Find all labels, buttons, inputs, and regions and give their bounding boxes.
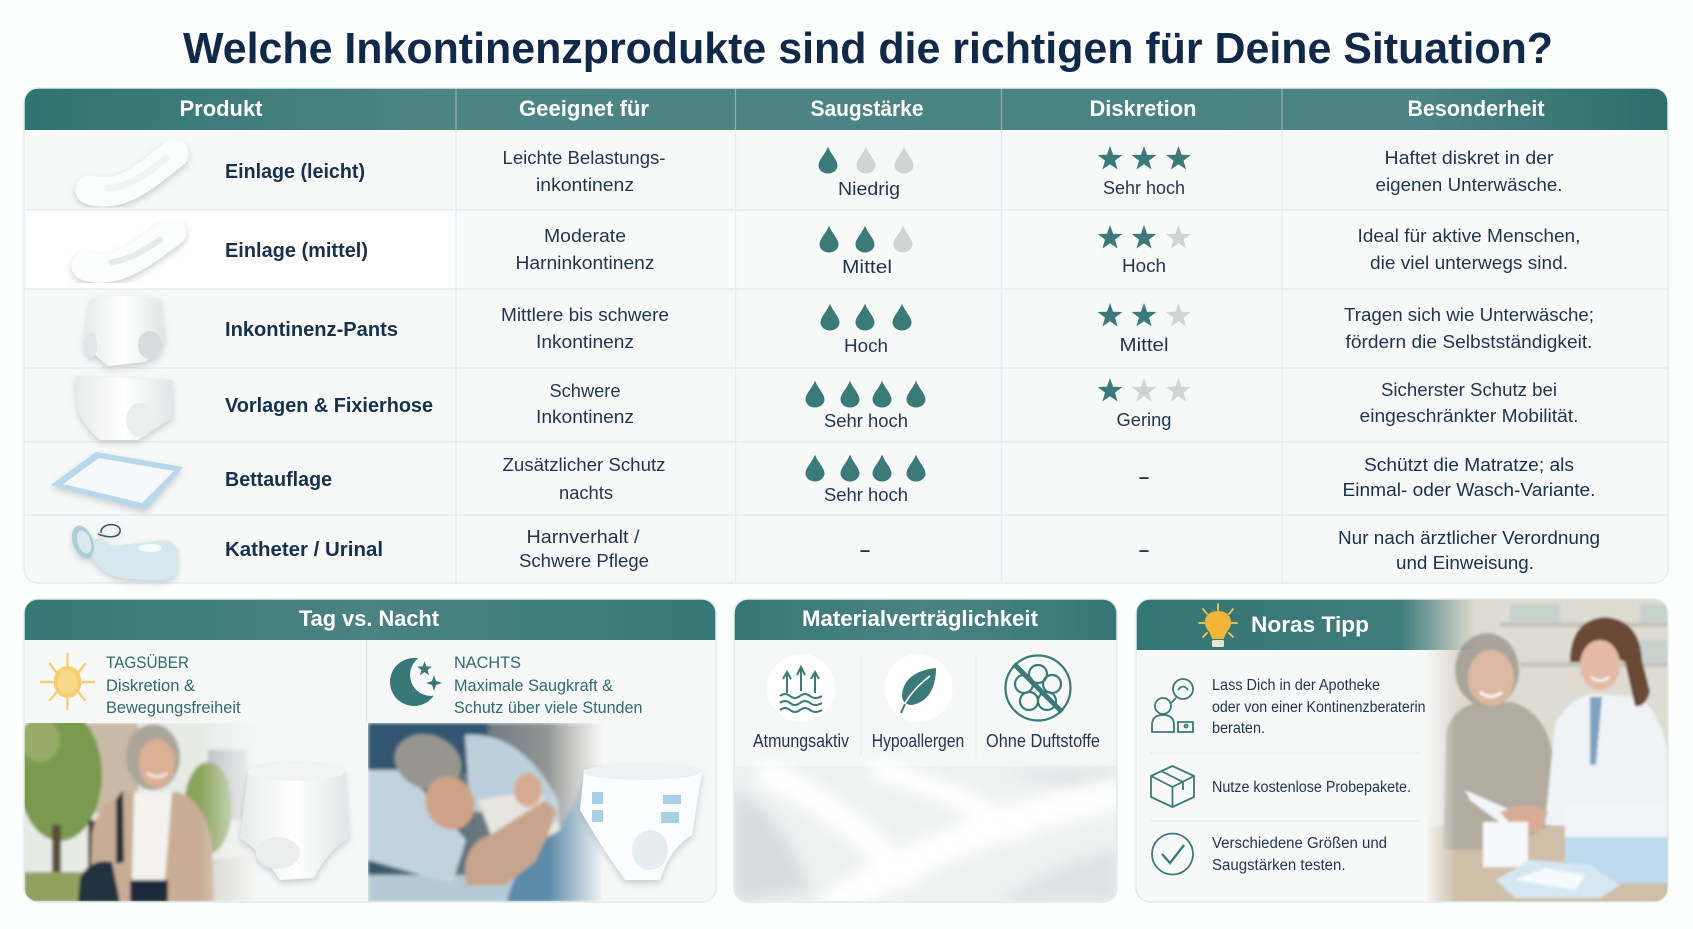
- rating: discretion sehr hoch: [1098, 146, 1191, 198]
- cell: suitable for, row 3: Mittlere bis schwere: [501, 304, 669, 325]
- photo: white pants product: [240, 763, 349, 880]
- cell: suitable for, row 4: [536, 380, 634, 427]
- table header row: [180, 96, 1545, 121]
- rating: absorbency none: –: [860, 539, 870, 560]
- text: nachts: [454, 654, 642, 717]
- cell: suitable for, row 6: [519, 526, 649, 571]
- table header row: Produkt: [180, 96, 263, 121]
- note, row 6: und Einweisung.: [1396, 552, 1534, 573]
- rating: absorbency niedrig: [818, 146, 914, 199]
- note, row 1: Haftet diskret in der: [1384, 147, 1554, 168]
- rating: absorbency sehr hoch: [806, 380, 926, 431]
- note, row 2: Ideal für aktive Menschen,: [1358, 225, 1580, 246]
- panel: Tag vs. Nacht: [18, 599, 716, 902]
- rating: absorbency niedrig: Niedrig: [838, 178, 900, 199]
- label: Bettauflage: Bettauflage: [225, 469, 332, 491]
- label: Vorlagen & Fixierhose: Vorlagen & Fixierhose: [225, 395, 433, 417]
- cell: suitable for, row 1: inkontinenz: [536, 174, 634, 195]
- text: tip sizes: [1212, 835, 1387, 874]
- cell: suitable for, row 1: [502, 147, 666, 195]
- cell: suitable for, row 6: Harnverhalt /: [526, 526, 640, 547]
- photo: woman sleeping in bed: [368, 723, 601, 902]
- cell: suitable for, row 3: Inkontinenz: [536, 331, 634, 352]
- icon: check mark: [1152, 834, 1193, 874]
- note, row 4: Sicherster Schutz bei: [1381, 379, 1557, 400]
- label: Einlage (mittel): Einlage (mittel): [225, 240, 368, 262]
- text: tip samples: Nutze kostenlose Probepakete.: [1212, 779, 1411, 796]
- icon: sun: [41, 654, 94, 709]
- rating: absorbency sehr hoch: Sehr hoch: [824, 410, 908, 431]
- heading: Materialverträglichkeit: Materialverträglichkeit: [802, 606, 1039, 631]
- cell: suitable for, row 5: [502, 454, 666, 503]
- note, row 3: Tragen sich wie Unterwäsche;: [1344, 304, 1594, 325]
- rating: absorbency sehr hoch, bed pad: [806, 454, 926, 505]
- cell: suitable for, row 2: [516, 225, 654, 273]
- rating: discretion none: –: [1139, 466, 1149, 487]
- icon: no fragrance: [1006, 656, 1070, 720]
- label: Atmungsaktiv: Atmungsaktiv: [753, 730, 850, 751]
- text: nachts: NACHTS: [454, 654, 521, 672]
- note, row 1: eigenen Unterwäsche.: [1376, 174, 1562, 195]
- text: tagsüber: TAGSÜBER: [106, 654, 189, 672]
- rating: absorbency hoch: Hoch: [844, 335, 888, 356]
- text: tip pharmacy: Lass Dich in der Apotheke: [1212, 677, 1380, 694]
- icon: bed pad: [51, 452, 183, 510]
- heading: Tag vs. Nacht: Tag vs. Nacht: [299, 606, 440, 631]
- text: tip pharmacy: [1212, 677, 1426, 737]
- photo: night diaper product: [580, 764, 702, 880]
- text: tagsüber: [106, 654, 241, 717]
- text: tip pharmacy: oder von einer Kontinenzberaterin: [1212, 699, 1426, 716]
- text: nachts: Schutz über viele Stunden: [454, 699, 642, 717]
- text: tagsüber: Diskretion &: [106, 677, 195, 695]
- note, row 5: Einmal- oder Wasch-Variante.: [1342, 479, 1596, 500]
- icon: moon and stars: [390, 654, 452, 706]
- rating: discretion hoch: [1098, 225, 1191, 276]
- cell: suitable for, row 1: Leichte Belastungs-: [502, 147, 666, 168]
- cell: suitable for, row 5: Zusätzlicher Schutz: [502, 454, 666, 475]
- rating: absorbency mittel: Mittel: [842, 256, 892, 277]
- text: tip pharmacy: beraten.: [1212, 720, 1265, 737]
- panel: product comparison table: [24, 88, 1668, 583]
- icon: package: [1151, 766, 1194, 807]
- rating: discretion mittel: [1098, 303, 1191, 355]
- rating: discretion sehr hoch: Sehr hoch: [1103, 177, 1185, 198]
- note, row 3: fördern die Selbstständigkeit.: [1346, 331, 1592, 352]
- title: Welche Inkontinenzprodukte sind die richtigen für Deine Situation?: [183, 24, 1553, 73]
- icon: pad with fixation pants: [75, 376, 173, 440]
- rating: absorbency mittel: [820, 226, 912, 277]
- rating: discretion none, urinal: –: [1139, 539, 1149, 560]
- cell: suitable for, row 5: nachts: [559, 482, 613, 503]
- note, row 3: [1344, 304, 1594, 352]
- rating: absorbency sehr hoch, bed pad: Sehr hoch: [824, 484, 908, 505]
- heading: Noras Tipp: Noras Tipp: [1251, 612, 1369, 637]
- photo: pharmacist advising an older woman: [1416, 600, 1668, 902]
- note, row 4: eingeschränkter Mobilität.: [1360, 405, 1578, 426]
- cell: suitable for, row 4: Inkontinenz: [536, 406, 634, 427]
- cell: suitable for, row 4: Schwere: [550, 380, 620, 401]
- label: Hypoallergen: Hypoallergen: [872, 730, 964, 751]
- text: tagsüber: Bewegungsfreiheit: [106, 699, 241, 717]
- panel: Materialverträglichkeit: [734, 599, 1117, 905]
- table header row: Saugstärke: [810, 96, 924, 121]
- rating: discretion gering: [1098, 378, 1191, 430]
- rating: discretion gering: Gering: [1116, 409, 1172, 430]
- panel: Noras Tipp: [1136, 590, 1680, 910]
- note, row 6: [1338, 527, 1600, 573]
- icon: light pad: [90, 154, 174, 192]
- cell: suitable for, row 6: Schwere Pflege: [519, 550, 649, 571]
- table header row: Geeignet für: [519, 96, 649, 121]
- cell: suitable for, row 3: [501, 304, 669, 352]
- label: Katheter / Urinal: Katheter / Urinal: [225, 539, 383, 561]
- note, row 5: Schützt die Matratze; als: [1364, 454, 1574, 475]
- note, row 2: die viel unterwegs sind.: [1370, 252, 1568, 273]
- photo: woman walking in the park: [24, 723, 250, 902]
- cell: suitable for, row 2: Moderate: [544, 225, 626, 246]
- text: tip sizes: Verschiedene Größen und: [1212, 835, 1387, 852]
- label: Einlage (leicht): Einlage (leicht): [225, 161, 365, 183]
- text: nachts: Maximale Saugkraft &: [454, 677, 613, 695]
- label: Inkontinenz-Pants: Inkontinenz-Pants: [225, 319, 398, 341]
- table header row: Besonderheit: [1408, 96, 1545, 121]
- icon: breathable: [767, 654, 835, 722]
- label: Ohne Duftstoffe: Ohne Duftstoffe: [986, 730, 1100, 751]
- note, row 4: [1360, 379, 1578, 426]
- rating: discretion hoch: Hoch: [1122, 255, 1166, 276]
- text: tip sizes: Saugstärken testen.: [1212, 857, 1346, 874]
- rating: absorbency hoch: [820, 304, 912, 356]
- icon: consultation: [1152, 679, 1193, 732]
- note, row 5: [1342, 454, 1596, 500]
- cell: suitable for, row 2: Harninkontinenz: [516, 252, 654, 273]
- icon: pants: [84, 296, 165, 366]
- table header row: Diskretion: [1090, 96, 1196, 121]
- icon: urinal: [68, 523, 178, 580]
- note, row 1: [1376, 147, 1562, 195]
- note, row 2: [1358, 225, 1580, 273]
- icon: medium pad: [86, 232, 172, 268]
- icon: leaf: [884, 654, 952, 722]
- rating: discretion mittel: Mittel: [1120, 334, 1168, 355]
- texture: soft fleece material: [734, 766, 1117, 905]
- icon: light bulb: [1199, 604, 1237, 647]
- note, row 6: Nur nach ärztlicher Verordnung: [1338, 527, 1600, 548]
